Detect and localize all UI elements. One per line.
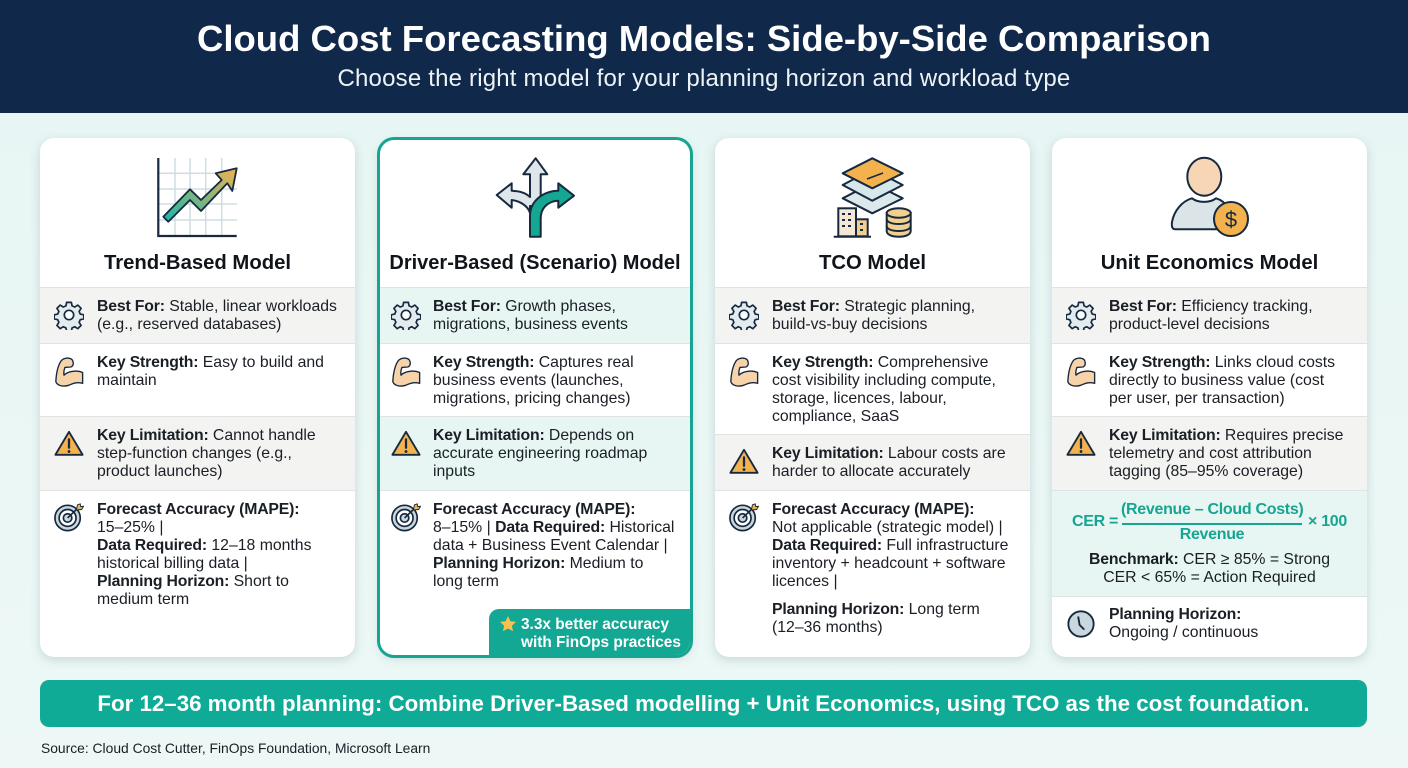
row: best for — [1052, 287, 1367, 343]
text: best for: Best For: Strategic planning, — [772, 298, 975, 315]
text: key strength: directly to business value (cost — [1109, 372, 1324, 389]
text: best for — [1109, 298, 1313, 333]
text: key strength — [1109, 354, 1335, 407]
row: key limitation — [380, 416, 690, 490]
text: key strength: Key Strength: Links cloud costs — [1109, 354, 1335, 371]
callout: finops accuracy — [489, 609, 690, 655]
heading: Driver-Based (Scenario) Model — [389, 252, 681, 274]
icon: branching arrows — [496, 157, 575, 238]
text: forecast details: historical billing data | — [97, 555, 248, 572]
row: planning horizon — [1052, 596, 1367, 657]
text: key limitation — [1109, 427, 1343, 480]
text: forecast details: Planning Horizon: Medium to — [433, 555, 643, 572]
text: best for — [772, 298, 975, 333]
callout text: with FinOps practices — [521, 634, 681, 651]
row: forecast accuracy — [40, 490, 355, 657]
formula — [1072, 501, 1347, 543]
text: forecast details — [97, 501, 312, 608]
text: forecast details — [433, 501, 674, 590]
text: key strength: per user, per transaction) — [1109, 390, 1285, 407]
formula denominator: Revenue — [1180, 526, 1244, 543]
text: key limitation: product launches) — [97, 463, 223, 480]
text: key strength — [433, 354, 634, 407]
text: key strength: business events (launches, — [433, 372, 624, 389]
text: best for: Best For: Growth phases, — [433, 298, 616, 315]
text: forecast details: 15–25% | — [97, 519, 163, 536]
text: benchmark — [1089, 551, 1330, 586]
text: forecast details: Forecast Accuracy (MAPE): — [97, 501, 299, 518]
icon: trend chart — [157, 158, 238, 238]
text: key strength: storage, licences, labour, — [772, 390, 947, 407]
text: best for: product-level decisions — [1109, 316, 1270, 333]
text: key limitation: harder to allocate accurately — [772, 463, 970, 480]
text: key strength: Key Strength: Easy to build and — [97, 354, 324, 371]
text: key limitation — [97, 427, 316, 480]
row: key limitation — [715, 434, 1030, 490]
row: cer formula and benchmark — [1052, 490, 1367, 596]
text: key limitation — [772, 445, 1006, 480]
text: key limitation: step-function changes (e.g., — [97, 445, 292, 462]
icon: warning — [1066, 430, 1096, 456]
text: forecast details: Planning Horizon: Short to — [97, 573, 289, 590]
text: benchmark: Benchmark: CER ≥ 85% = Strong — [1089, 551, 1330, 568]
panel: driver-based model — [380, 140, 690, 655]
icon: warning — [730, 448, 758, 474]
text: forecast details: long term — [433, 573, 499, 590]
icon: arm — [730, 357, 758, 387]
icon: target — [391, 503, 421, 532]
row: best for — [715, 287, 1030, 343]
row: best for — [380, 287, 690, 343]
text: forecast details: Not applicable (strategic model) | — [772, 519, 1003, 536]
recommendation banner — [40, 680, 1367, 727]
text: forecast details: Data Required: Full infrastructure — [772, 537, 1008, 554]
source note: Source: Cloud Cost Cutter, FinOps Foundation, Microsoft Learn — [41, 740, 430, 756]
icon: target — [54, 503, 84, 532]
text: forecast details: 8–15% | Data Required: Historical — [433, 519, 674, 536]
text: forecast details: Forecast Accuracy (MAPE): — [433, 501, 635, 518]
text: key strength: compliance, SaaS — [772, 408, 899, 425]
icon: warning — [392, 430, 420, 456]
title: Cloud Cost Forecasting Models: Side-by-Side Comparison — [197, 18, 1211, 59]
text: best for: Best For: Stable, linear workloads — [97, 298, 337, 315]
icon: arm — [55, 357, 84, 387]
text: planning horizon: Planning Horizon: Long term — [772, 601, 980, 618]
text: key limitation: Key Limitation: Depends on — [433, 427, 634, 444]
icon: gear — [1066, 302, 1096, 330]
text: key limitation — [433, 427, 647, 480]
row: key strength — [380, 343, 690, 416]
icon: star — [500, 616, 516, 632]
row: key strength — [40, 343, 355, 416]
icon: gear — [729, 302, 759, 330]
text: planning horizon: (12–36 months) — [772, 619, 883, 636]
icon: warning — [54, 430, 84, 456]
icon: person with dollar coin: $ — [1225, 207, 1237, 232]
icon: layers, buildings and database — [834, 157, 912, 238]
icon: arm — [392, 357, 420, 387]
text: key limitation: tagging (85–95% coverage) — [1109, 463, 1303, 480]
row: key limitation — [40, 416, 355, 490]
text: planning horizon — [772, 601, 980, 636]
formula multiplier: × 100 — [1308, 513, 1347, 530]
icon: gear — [391, 302, 421, 330]
text: key limitation: Key Limitation: Cannot handle — [97, 427, 316, 444]
callout text: 3.3x better accuracy — [521, 616, 669, 633]
text: forecast details: Forecast Accuracy (MAPE): — [772, 501, 974, 518]
text: best for: Best For: Efficiency tracking, — [1109, 298, 1313, 315]
text: best for: build-vs-buy decisions — [772, 316, 927, 333]
text: planning horizon — [1109, 606, 1258, 642]
icon: gear — [54, 302, 84, 330]
row: key strength — [715, 343, 1030, 434]
text: forecast details: Data Required: 12–18 months — [97, 537, 312, 554]
callout text — [521, 616, 681, 651]
text: best for: migrations, business events — [433, 316, 628, 333]
text: key strength — [97, 354, 324, 389]
text: key limitation: Key Limitation: Labour costs are — [772, 445, 1006, 462]
heading: Trend-Based Model — [104, 252, 291, 274]
row: forecast accuracy — [715, 490, 1030, 657]
panel: trend-based model — [40, 138, 355, 657]
text: key strength: migrations, pricing changes) — [433, 390, 631, 407]
text: forecast details: data + Business Event Calendar | — [433, 537, 668, 554]
text: forecast details — [772, 501, 1008, 590]
heading: TCO Model — [819, 252, 926, 274]
text: key limitation: Key Limitation: Requires precise — [1109, 427, 1343, 444]
formula label: CER = — [1072, 513, 1118, 530]
formula fraction line — [1122, 523, 1302, 524]
text: planning horizon: Planning Horizon: — [1109, 606, 1241, 623]
icon: target — [729, 503, 759, 532]
heading: Unit Economics Model — [1101, 252, 1318, 274]
text: key strength: cost visibility including compute, — [772, 372, 996, 389]
icon: person with dollar coin — [1170, 156, 1249, 237]
panel: unit economics model — [1052, 138, 1367, 657]
subtitle: Choose the right model for your planning horizon and workload type — [338, 65, 1070, 92]
icon: arm — [1067, 357, 1096, 387]
text: key limitation: accurate engineering roadmap — [433, 445, 647, 462]
text: planning horizon: Ongoing / continuous — [1109, 624, 1258, 641]
text: key limitation: telemetry and cost attribution — [1109, 445, 1312, 462]
text: key strength: maintain — [97, 372, 157, 389]
text: best for: (e.g., reserved databases) — [97, 316, 281, 333]
text: forecast details: licences | — [772, 573, 838, 590]
text: key limitation: inputs — [433, 463, 475, 480]
row: key strength — [1052, 343, 1367, 416]
row: key limitation — [1052, 416, 1367, 490]
text: forecast details: inventory + headcount + software — [772, 555, 1006, 572]
row: best for — [40, 287, 355, 343]
text: key strength — [772, 354, 996, 425]
row: forecast accuracy — [380, 490, 690, 655]
panel: tco model — [715, 138, 1030, 657]
header banner — [0, 0, 1408, 113]
recommendation banner: For 12–36 month planning: Combine Driver-Based modelling + Unit Economics, using TCO as the cost foundation. — [97, 691, 1310, 716]
text: key strength: Key Strength: Comprehensive — [772, 354, 988, 371]
text: benchmark: CER < 65% = Action Required — [1103, 569, 1316, 586]
text: key strength: Key Strength: Captures real — [433, 354, 634, 371]
icon: clock — [1067, 610, 1095, 638]
text: best for — [97, 298, 337, 333]
text: best for — [433, 298, 628, 333]
text: forecast details: medium term — [97, 591, 189, 608]
formula numerator: (Revenue – Cloud Costs) — [1121, 501, 1303, 518]
